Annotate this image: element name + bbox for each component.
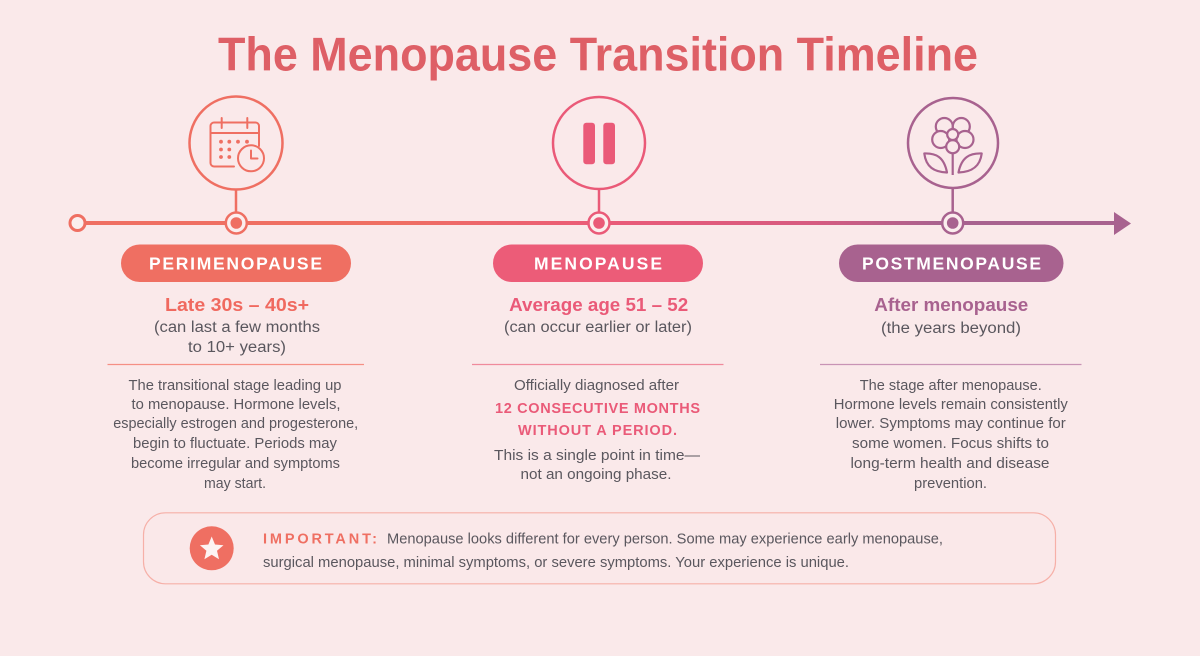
age range: postmenopause — [874, 295, 1028, 337]
label pill: postmenopause — [839, 244, 1064, 282]
age range: postmenopause: (the years beyond) — [881, 320, 1021, 337]
description: postmenopause: The stage after menopause. — [860, 378, 1042, 394]
label pill: menopause — [493, 244, 703, 282]
description: perimenopause: to menopause. Hormone levels, — [132, 397, 340, 413]
age range: menopause — [504, 295, 692, 336]
description: menopause: not an ongoing phase. — [520, 467, 672, 483]
age range: menopause: (can occur earlier or later) — [504, 319, 692, 336]
label pill: perimenopause — [121, 244, 351, 282]
callout text: Menopause looks different for every person. Some may experience early menopause, — [387, 532, 943, 548]
description: perimenopause — [113, 378, 358, 492]
description: postmenopause: some women. Focus shifts to — [852, 436, 1049, 452]
marker: postmenopause node — [942, 212, 963, 234]
stage 2: menopause — [472, 97, 724, 483]
description: postmenopause: long-term health and disease — [850, 456, 1050, 472]
description: perimenopause: begin to fluctuate. Periods may — [133, 436, 338, 452]
age range: perimenopause: Late 30s – 40s+ — [165, 295, 309, 315]
description: perimenopause: become irregular and symptoms — [131, 456, 340, 472]
description: perimenopause: The transitional stage leading up — [128, 378, 342, 394]
timeline axis with arrow — [70, 212, 1131, 235]
callout: important note — [144, 513, 1056, 584]
description: postmenopause: Hormone levels remain consistently — [834, 397, 1069, 413]
stage 3: postmenopause — [820, 98, 1082, 492]
description: menopause: 12 CONSECUTIVE MONTHS — [495, 401, 700, 417]
icon: star badge — [190, 526, 234, 570]
label pill: menopause: MENOPAUSE — [534, 254, 662, 274]
marker: menopause node — [588, 212, 610, 234]
age range: menopause: Average age 51 – 52 — [509, 295, 688, 315]
description: menopause — [494, 378, 701, 483]
icon: flower — [908, 98, 998, 212]
description: menopause: Officially diagnosed after — [514, 378, 679, 394]
label pill: postmenopause: POSTMENOPAUSE — [862, 254, 1041, 274]
description: menopause: WITHOUT A PERIOD. — [518, 423, 677, 439]
icon: pause — [553, 97, 645, 212]
age range: perimenopause: to 10+ years) — [188, 339, 286, 356]
age range: perimenopause: (can last a few months — [154, 319, 320, 336]
marker: perimenopause node — [226, 212, 247, 234]
age range: postmenopause: After menopause — [874, 295, 1028, 315]
description: perimenopause: may start. — [204, 476, 266, 492]
stage 1: perimenopause — [108, 96, 364, 492]
icon: calendar with clock — [190, 96, 282, 212]
description: postmenopause: lower. Symptoms may continue for — [836, 416, 1066, 432]
callout text — [263, 532, 943, 571]
label pill: perimenopause: PERIMENOPAUSE — [149, 254, 322, 274]
callout text: surgical menopause, minimal symptoms, or severe symptoms. Your experience is unique. — [263, 555, 849, 571]
description: menopause: This is a single point in time— — [494, 448, 701, 464]
description: perimenopause: especially estrogen and progesterone, — [113, 416, 358, 432]
title: The Menopause Transition Timeline — [218, 28, 978, 80]
description: postmenopause — [834, 378, 1069, 492]
description: postmenopause: prevention. — [914, 476, 987, 492]
callout text: IMPORTANT: — [263, 532, 377, 548]
age range: perimenopause — [154, 295, 320, 356]
